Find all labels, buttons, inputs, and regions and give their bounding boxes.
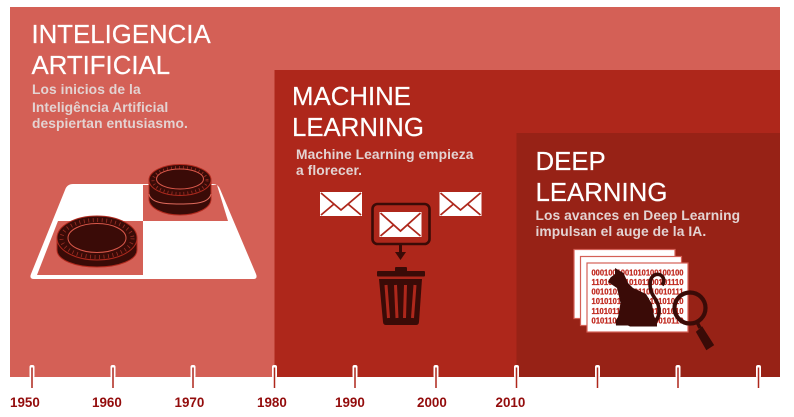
- icon: cat: [608, 268, 664, 326]
- panel: deep learning: [516, 133, 780, 377]
- large checker: [57, 216, 137, 267]
- binary data: 1010101101010110101010: [592, 297, 684, 306]
- binary data: 1101010110101100101110: [592, 278, 684, 287]
- text: machine learning empieza: Machine Learning empieza: [296, 147, 474, 162]
- text: inicios: Inteligência Artificial: [32, 100, 168, 115]
- text: avances: impulsan el auge de la IA.: [536, 224, 706, 239]
- heading: inteligencia artificial: INTELIGENCIA: [32, 21, 211, 49]
- year labels: 1970: [174, 395, 204, 410]
- binary data: 1101011010100101101010: [592, 307, 684, 316]
- panel: machine learning: [274, 70, 780, 377]
- icon: magnifying glass: [674, 292, 714, 350]
- arrow: to trash: [395, 245, 406, 260]
- text: avances: Los avances en Deep Learning: [536, 208, 740, 223]
- year labels: 1960: [92, 395, 122, 410]
- year labels: [10, 395, 525, 410]
- icon: right envelope: [440, 192, 482, 216]
- icon: left envelope: [320, 192, 362, 216]
- year labels: 2010: [496, 395, 525, 410]
- binary data: 0001001001010100100100: [592, 268, 684, 278]
- heading: machine learning: LEARNING: [292, 114, 424, 142]
- year labels: 2000: [417, 395, 447, 410]
- heading: deep learning: DEEP: [536, 148, 606, 176]
- binary data: [592, 268, 684, 326]
- year labels: 1950: [10, 395, 40, 410]
- heading: machine learning: MACHINE: [292, 83, 411, 111]
- text: inicios: Los inicios de la: [32, 82, 141, 97]
- tick marks: [30, 365, 761, 388]
- year labels: 1990: [335, 395, 365, 410]
- text: machine learning empieza: a florecer.: [296, 163, 362, 178]
- binary data: 0101101101011010010110: [592, 316, 684, 326]
- year labels: 1980: [257, 395, 287, 410]
- timeline: [10, 365, 761, 410]
- icon: trash can: [377, 267, 425, 325]
- heading: deep learning: LEARNING: [536, 179, 667, 207]
- text: inicios: despiertan entusiasmo.: [32, 116, 188, 131]
- small checker stack: [149, 164, 211, 215]
- icon: data pages with cat: [574, 250, 714, 350]
- icon: selected envelope: [372, 204, 430, 244]
- heading: inteligencia artificial: ARTIFICIAL: [32, 52, 170, 80]
- binary data: 0010101001011010010111: [592, 288, 684, 296]
- icon: checkers board: [30, 164, 257, 279]
